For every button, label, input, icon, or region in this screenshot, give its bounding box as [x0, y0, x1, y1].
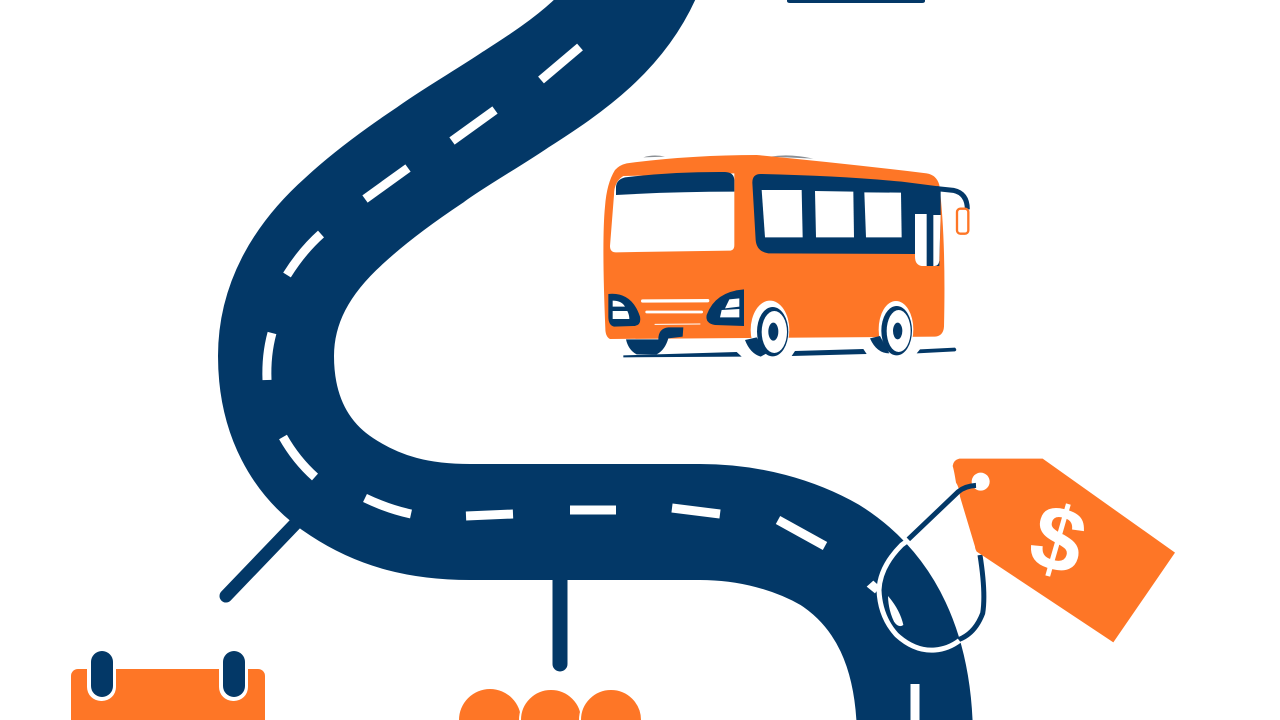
left headlight — [608, 294, 640, 327]
top signpost bar — [787, 0, 925, 3]
winding road — [267, 0, 915, 720]
right headlight — [706, 289, 744, 326]
side window band — [752, 174, 941, 266]
front wheel — [745, 301, 789, 359]
icon: price tag — [867, 459, 1175, 650]
dollar sign: $ — [1019, 484, 1097, 596]
calendar ring right — [219, 648, 248, 701]
icon: calendar — [71, 648, 265, 720]
calendar page — [71, 669, 265, 720]
road centre dashes — [267, 47, 915, 720]
strap upper dark section — [908, 485, 976, 539]
road connector stem: calendar — [226, 522, 297, 596]
ground lines — [623, 348, 956, 357]
bus body — [603, 155, 944, 339]
calendar ring left — [87, 648, 116, 701]
strap knot — [867, 581, 880, 593]
mirror — [957, 209, 968, 234]
grille — [643, 301, 708, 324]
windshield — [610, 173, 734, 252]
tag body — [953, 459, 1175, 642]
roof details — [643, 155, 813, 159]
tag strap over road — [879, 539, 959, 650]
icon: coins — [459, 689, 642, 720]
tag hole — [972, 473, 990, 491]
road connector stem: coins — [552, 560, 568, 664]
mirror arm — [937, 189, 967, 209]
rear wheel — [870, 301, 913, 358]
road highlight — [888, 596, 903, 626]
bumper and front wheel — [626, 327, 683, 354]
windshield shade — [616, 172, 734, 195]
strap lower dark section — [959, 555, 984, 639]
passenger windows — [762, 190, 941, 266]
icon: orange bus — [603, 155, 968, 359]
